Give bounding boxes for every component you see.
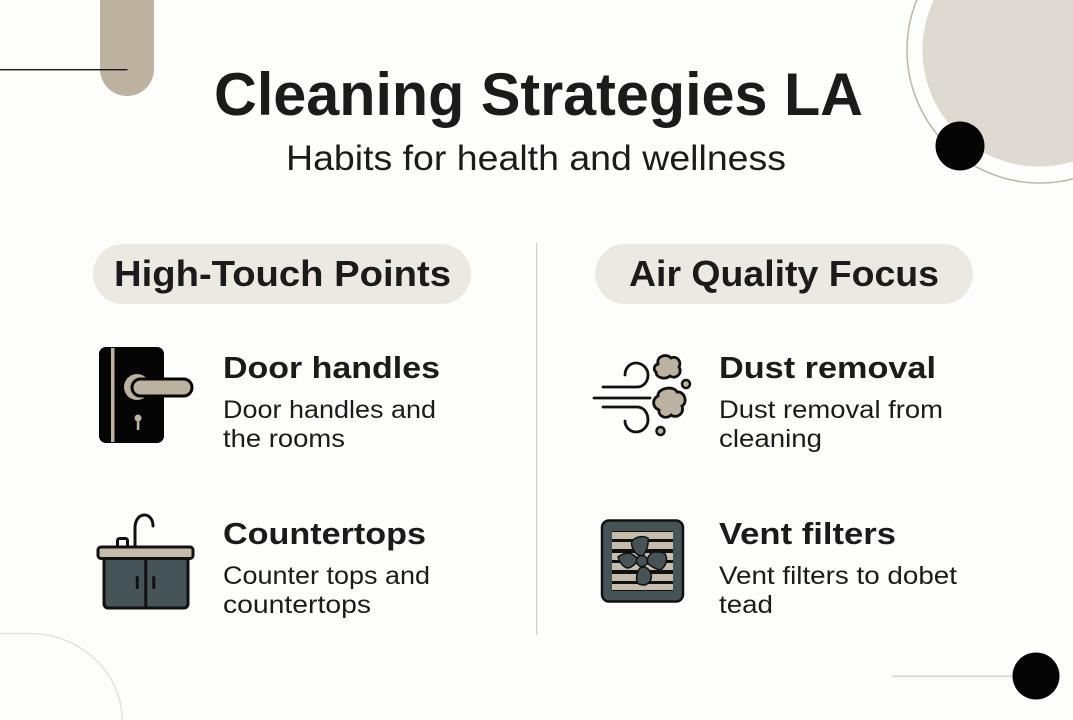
title: Cleaning Strategies LA <box>214 61 863 128</box>
item text: dust removal <box>719 350 943 453</box>
icon: door handle <box>99 347 192 443</box>
center divider <box>536 243 537 635</box>
icon: dust and wind <box>594 356 690 435</box>
item text: countertops <box>223 516 430 619</box>
item text: vent filters: Vent filters <box>719 516 896 551</box>
item text: vent filters <box>719 516 957 619</box>
item text: vent filters: tead <box>719 591 773 619</box>
item text: door handles: Door handles and <box>223 396 436 424</box>
decoration: top-right circles <box>907 0 1073 183</box>
item text: door handles <box>223 350 440 453</box>
item text: dust removal: Dust removal <box>719 350 936 385</box>
heading: Air Quality Focus: Air Quality Focus <box>629 253 939 294</box>
item text: dust removal: Dust removal from <box>719 396 943 424</box>
icon: sink counter <box>98 515 193 608</box>
icon: vent fan <box>602 520 683 602</box>
subtitle: Habits for health and wellness <box>286 139 786 178</box>
heading: Air Quality Focus <box>595 244 973 304</box>
item text: door handles: Door handles <box>223 350 440 385</box>
item text: countertops: Countertops <box>223 516 426 551</box>
decoration: top-left pill and line <box>0 0 154 96</box>
item text: countertops: countertops <box>223 591 371 619</box>
item text: door handles: the rooms <box>223 425 345 453</box>
item text: vent filters: Vent filters to dobet <box>719 562 957 590</box>
item text: dust removal: cleaning <box>719 425 822 453</box>
panel: air quality focus <box>594 244 973 619</box>
heading: High-Touch Points: High-Touch Points <box>114 253 451 294</box>
item text: countertops: Counter tops and <box>223 562 430 590</box>
panel: high-touch points <box>93 244 471 619</box>
heading: High-Touch Points <box>93 244 471 304</box>
decoration: bottom-right line and dot <box>892 652 1060 700</box>
decoration: bottom-left arc <box>0 634 122 720</box>
